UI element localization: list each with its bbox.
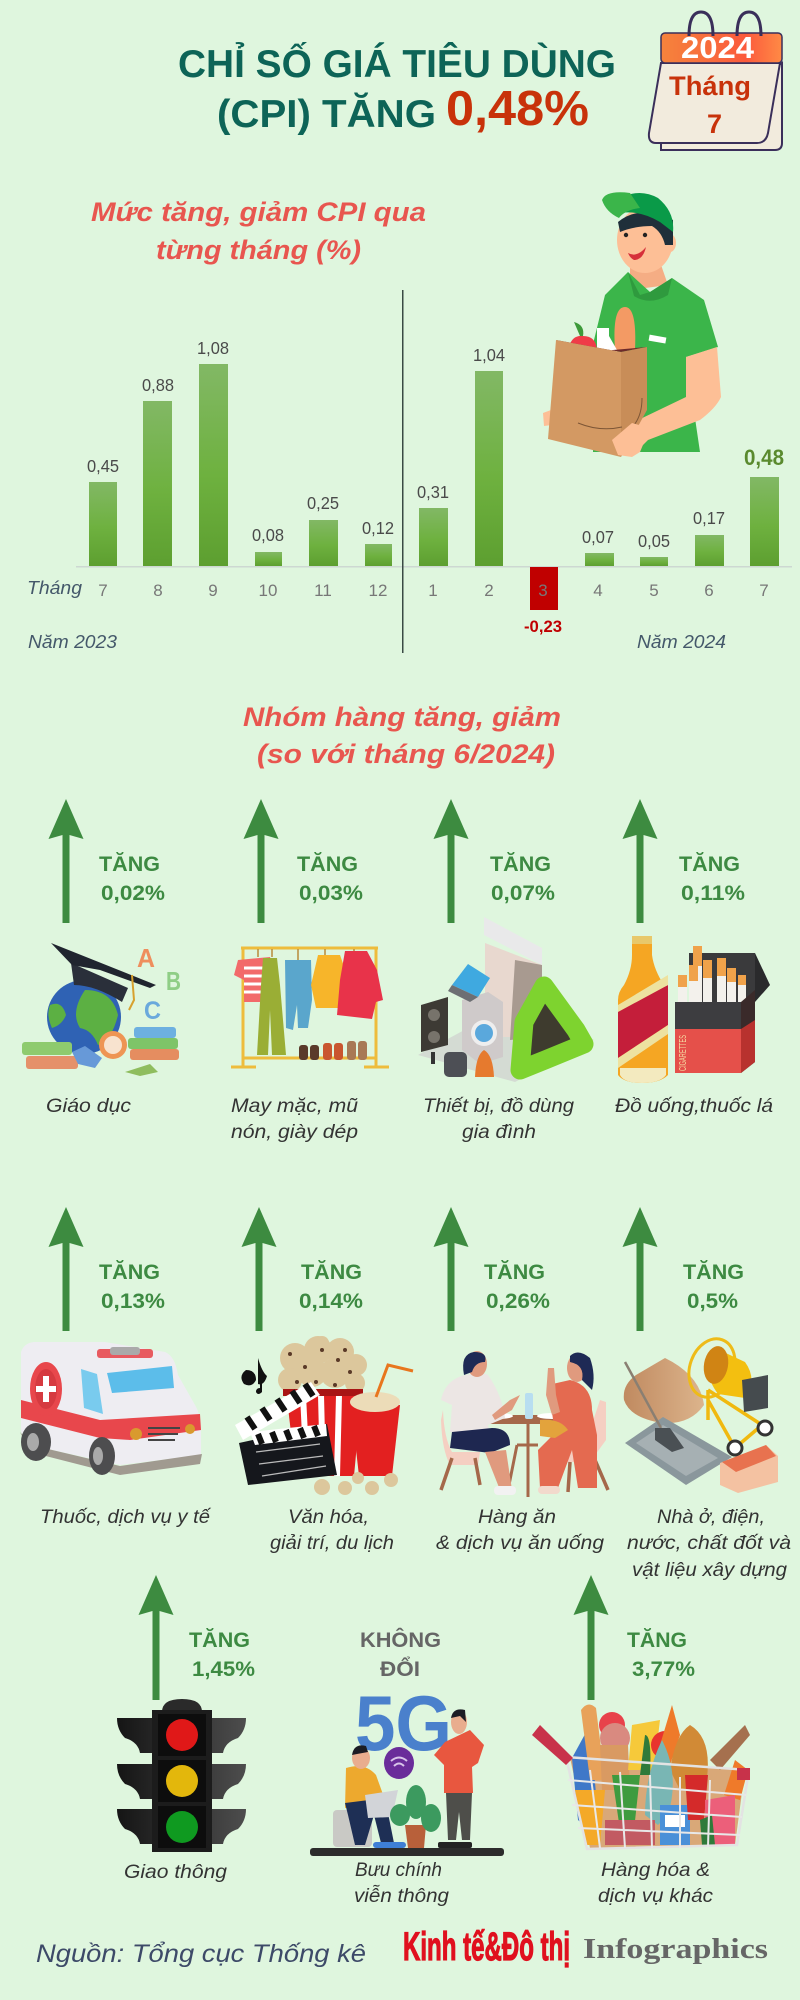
logo: Infographics [583,1934,768,1965]
heading: commodity groups [243,702,561,769]
icon: globe, graduation cap, books [22,943,181,1076]
bar chart: monthly CPI: 1,08 [197,338,229,358]
title: (CPI) TĂNG [217,92,436,136]
icon: ambulance [20,1342,202,1475]
arrow up [48,1207,84,1331]
bar chart: monthly CPI: -0,23 [524,617,562,636]
logo: Kinh tế&Đô thị [403,1925,570,1969]
label: Văn hóa, [288,1507,369,1528]
bar chart: monthly CPI: 7 [759,581,769,600]
value: KHÔNG [360,1628,441,1652]
group: post and telecom [310,1628,504,1907]
value: TĂNG [627,1629,687,1652]
label: Giao thông [124,1862,227,1883]
calendar icon: Tháng [669,71,751,101]
label: gia đình [462,1122,536,1143]
arrow up [244,799,278,923]
arrow up [434,799,468,923]
bar chart: monthly CPI: 0,31 [417,482,449,502]
arrow up [622,799,658,923]
bar chart: monthly CPI: 0,12 [362,518,394,538]
value [299,1261,363,1313]
value: TĂNG [484,1261,545,1284]
label: vật liệu xây dựng [632,1560,787,1581]
arrow up [574,1575,608,1700]
icon: whisky bottle and cigarettes: CIGARETTES [678,1035,689,1071]
value [99,1261,165,1313]
bar chart: monthly CPI: 8 [153,581,163,600]
bar chart: monthly CPI [27,290,792,653]
bar chart: monthly CPI: 0,48 [744,445,784,470]
value: 0,14% [299,1290,363,1313]
group: medicine and health [20,1207,212,1528]
bar chart: monthly CPI: 4 [593,581,603,600]
bar chart: monthly CPI: 0,05 [638,531,670,551]
bar chart: monthly CPI: 1,04 [473,345,505,365]
value: TĂNG [683,1261,744,1284]
value: 1,45% [192,1658,255,1681]
bar chart: monthly CPI: 0,17 [693,508,725,528]
icon: 5G with two people: 5G [355,1679,452,1767]
value [627,1629,695,1681]
icon: couple dining [441,1351,608,1497]
bar chart: monthly CPI: 12 [369,581,387,600]
value: TĂNG [297,853,358,876]
arrow up [48,799,84,923]
heading: monthly CPI [91,197,426,265]
label: Thiết bị, đồ dùng [423,1096,574,1117]
icon: globe, graduation cap, books: B [166,966,181,996]
label [627,1507,791,1581]
value: TĂNG [490,853,551,876]
bar chart: monthly CPI: 0,88 [142,375,174,395]
bar chart: monthly CPI: 3 [538,581,548,600]
value: TĂNG [301,1261,362,1284]
label: viễn thông [354,1886,449,1907]
label: nước, chất đốt và [627,1533,791,1554]
value: TĂNG [189,1629,250,1652]
label: May mặc, mũ [231,1096,358,1117]
source note: Nguồn: Tổng cục Thống kê [36,1940,366,1968]
icon: globe, graduation cap, books: C [144,997,161,1025]
value [679,853,745,905]
value: 0,07% [491,882,555,905]
title: 0,48% [446,82,589,136]
bar chart: monthly CPI: Tháng [27,578,82,598]
label: Hàng hóa & [601,1860,710,1881]
bar chart: monthly CPI: 0,08 [252,525,284,545]
value: ĐỔI [380,1657,420,1681]
value: 0,26% [486,1290,550,1313]
icon: globe, graduation cap, books: A [137,943,155,973]
value [360,1628,441,1681]
icon: shopping basket of food [532,1704,750,1849]
label [270,1507,394,1554]
label: Giáo dục [46,1096,132,1117]
label [231,1096,358,1143]
value: 0,11% [681,882,745,905]
group: household appliances [418,799,594,1143]
bar chart: monthly CPI: 7 [98,581,108,600]
bar chart: monthly CPI: 0,07 [582,527,614,547]
calendar icon: 7 [707,109,722,139]
value [683,1261,744,1313]
icon: 5G with two people [310,1679,504,1856]
arrow up [138,1575,174,1700]
value: TĂNG [99,853,160,876]
label: Bưu chính [355,1860,442,1881]
icon: popcorn, drink and clapperboard [235,1336,413,1495]
label: & dịch vụ ăn uống [436,1533,604,1554]
value: 0,5% [687,1290,738,1313]
heading: monthly CPI: từng tháng (%) [156,235,361,265]
calendar icon [649,12,782,150]
bar chart: monthly CPI: 10 [259,581,277,600]
label: Hàng ăn [478,1507,556,1528]
group: transport [117,1575,255,1883]
heading: commodity groups: (so với tháng 6/2024) [257,739,555,769]
group: housing and construction [622,1207,791,1581]
arrow up [434,1207,468,1331]
group: education [22,799,181,1117]
icon: clothes rack [231,948,389,1067]
bar chart: monthly CPI: 5 [649,581,659,600]
label [436,1507,604,1554]
arrow up [242,1207,276,1331]
value: 3,77% [632,1658,695,1681]
label: dịch vụ khác [598,1886,714,1907]
bar chart: monthly CPI: 2 [484,581,494,600]
value [484,1261,550,1313]
value: TĂNG [679,853,740,876]
label: nón, giày dép [231,1122,358,1143]
icon: cement mixer, sand and bricks [624,1332,778,1493]
group: clothing [231,799,389,1143]
bar chart: monthly CPI: 0,25 [307,493,339,513]
label: giải trí, du lịch [270,1533,394,1554]
label: Đồ uống,thuốc lá [615,1096,773,1117]
label: Nhà ở, điện, [657,1507,765,1528]
value: 0,03% [299,882,363,905]
bar chart: monthly CPI: 6 [704,581,714,600]
bar chart: monthly CPI: 1 [428,581,438,600]
title: CHỈ SỐ GIÁ TIÊU DÙNG [178,41,616,86]
value [297,853,363,905]
bar chart: monthly CPI: Năm 2023 [28,632,117,652]
value [189,1629,255,1681]
heading: monthly CPI: Mức tăng, giảm CPI qua [91,197,426,227]
title [178,41,616,136]
value: TĂNG [99,1261,160,1284]
heading: commodity groups: Nhóm hàng tăng, giảm [243,702,561,732]
group: beverages and tobacco [615,799,773,1117]
value: 0,13% [101,1290,165,1313]
value [490,853,555,905]
value [99,853,165,905]
bar chart: monthly CPI: 0,45 [87,456,119,476]
value: 0,02% [101,882,165,905]
illustration: shopper with grocery bag [543,192,721,457]
icon: appliances and recycling symbol [418,917,594,1082]
label: Thuốc, dịch vụ y tế [40,1507,212,1528]
calendar icon: 2024 [681,30,755,65]
icon: traffic light [117,1699,246,1852]
bar chart: monthly CPI: 11 [314,581,332,600]
group: food services [434,1207,608,1554]
arrow up [622,1207,658,1331]
bar chart: monthly CPI: Năm 2024 [637,632,726,652]
label [598,1860,714,1907]
label [354,1860,449,1907]
bar chart: monthly CPI: 9 [208,581,218,600]
group: other goods and services [532,1575,750,1907]
group: culture and entertainment [235,1207,413,1554]
label [423,1096,574,1143]
icon: whisky bottle and cigarettes [618,936,770,1083]
